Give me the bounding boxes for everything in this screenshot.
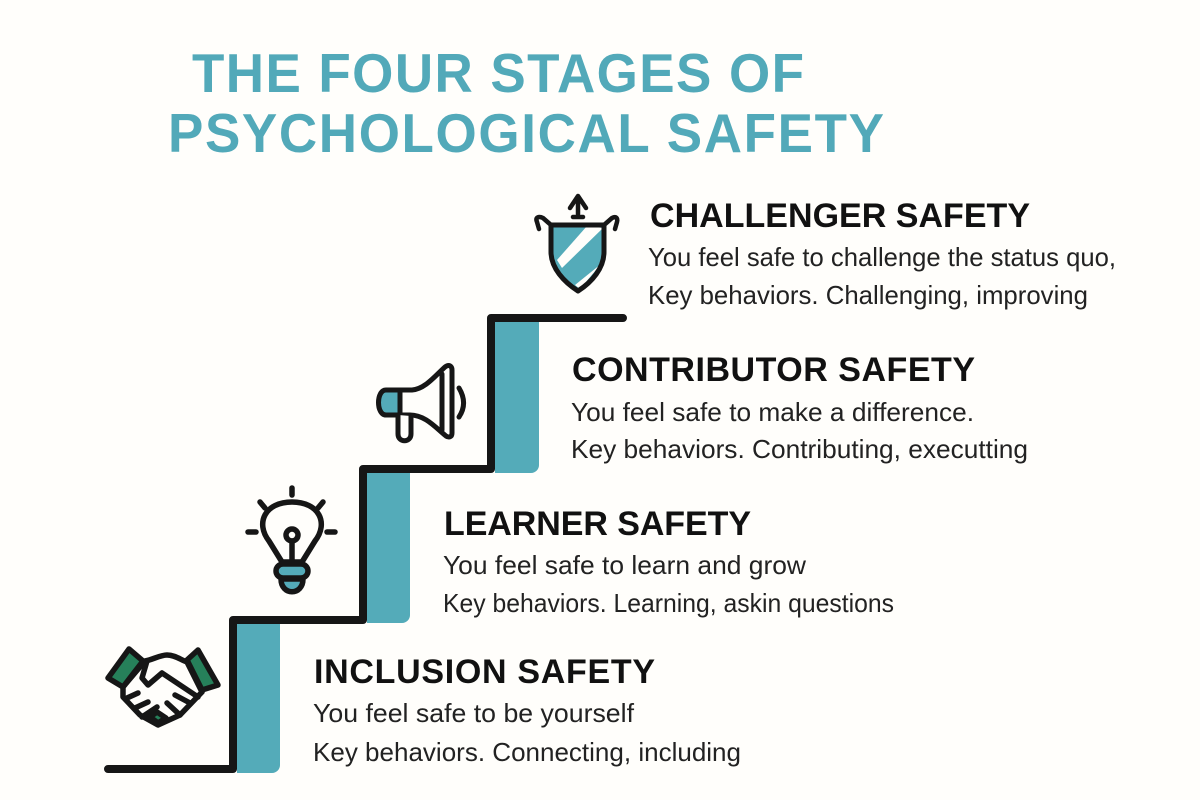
stage: challenger safety: Key behaviors. Challenging, improving: [648, 280, 1088, 310]
title: PSYCHOLOGICAL SAFETY: [168, 103, 884, 164]
title: THE FOUR STAGES OF: [192, 43, 804, 104]
title: [168, 43, 884, 164]
stage: challenger safety: [648, 197, 1116, 310]
staircase: [108, 318, 623, 773]
stage: learner safety: Key behaviors. Learning, askin questions: [443, 588, 894, 618]
stair line: [108, 318, 623, 769]
stage: challenger safety: CHALLENGER SAFETY: [650, 197, 1030, 235]
stage: challenger safety: You feel safe to challenge the status quo,: [648, 242, 1116, 272]
stage: learner safety: [443, 505, 894, 618]
icon: shield: [536, 196, 617, 291]
stage: inclusion safety: Key behaviors. Connecting, including: [313, 737, 741, 767]
stage: learner safety: LEARNER SAFETY: [444, 505, 751, 543]
icon: light bulb: [248, 488, 335, 592]
stage: contributor safety: [571, 351, 1028, 464]
stage: contributor safety: Key behaviors. Contributing, executting: [571, 434, 1028, 464]
stage: contributor safety: You feel safe to make a difference.: [571, 397, 974, 427]
icon: megaphone: [378, 366, 464, 441]
stage: inclusion safety: INCLUSION SAFETY: [314, 653, 655, 691]
stair riser: inclusion: [237, 624, 280, 773]
stair riser: contributor: [495, 322, 539, 473]
stage: learner safety: You feel safe to learn and grow: [443, 550, 806, 580]
icon: handshake: [108, 649, 218, 725]
stage: inclusion safety: [313, 653, 741, 767]
stage: contributor safety: CONTRIBUTOR SAFETY: [572, 351, 975, 389]
stage: inclusion safety: You feel safe to be yourself: [313, 698, 635, 728]
stair riser: learner: [367, 473, 410, 623]
